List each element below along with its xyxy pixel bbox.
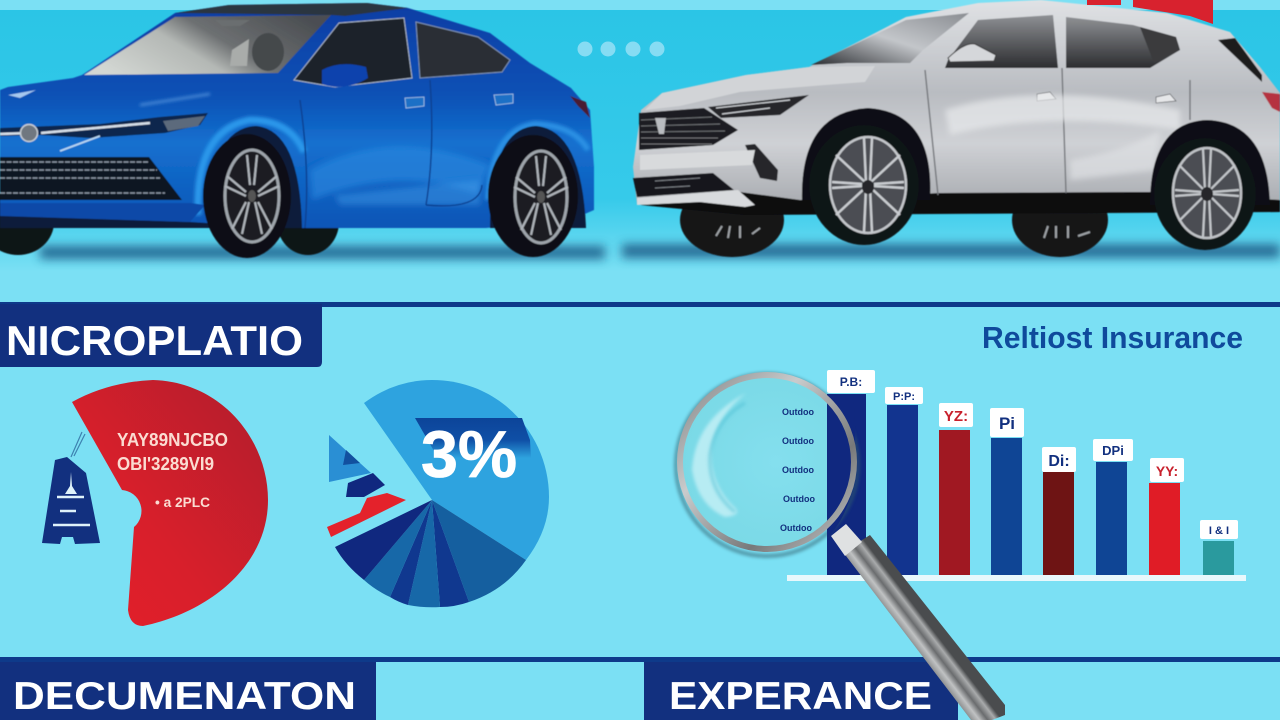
door lines	[925, 68, 1190, 195]
icon: price tag	[42, 432, 100, 544]
heading: nicroplatio: NICROPLATIO	[6, 317, 303, 364]
mirror	[948, 44, 996, 62]
pie text: OBI'3289VI9	[117, 454, 214, 474]
door handles	[1037, 92, 1056, 101]
magnifying glass	[676, 374, 1005, 720]
emblem	[20, 124, 38, 142]
axis labels in lens: Outdoo	[780, 523, 812, 533]
red boxes behind roof	[1087, 0, 1213, 24]
bar chart: YZ:	[944, 408, 968, 425]
bars	[827, 394, 1234, 575]
grille	[639, 108, 738, 150]
blue pie chart	[335, 380, 549, 607]
lens shadow	[676, 374, 858, 556]
tail light	[570, 96, 590, 118]
door lines	[300, 80, 482, 228]
body	[633, 0, 1280, 205]
windows	[811, 13, 969, 65]
axis labels in lens: Outdoo	[782, 465, 814, 475]
bar value labels	[827, 370, 1238, 539]
heading: experience: EXPERANCE	[669, 675, 932, 718]
fender highlights	[198, 120, 304, 215]
car shadows	[40, 244, 1280, 259]
mirror	[322, 64, 368, 87]
rear wheel	[488, 135, 578, 257]
silver SUV	[633, 0, 1280, 257]
heading: documentation	[0, 662, 376, 720]
light sector	[364, 380, 549, 560]
pie text	[117, 430, 228, 510]
far wheels	[680, 183, 1108, 257]
dark sectors	[432, 500, 526, 602]
axis labels in lens: Outdoo	[782, 407, 814, 417]
blue sedan	[0, 3, 594, 258]
chart title: Reltiost Insurance	[982, 320, 1243, 355]
handle	[831, 524, 1005, 720]
bar chart: Di:	[1048, 453, 1070, 470]
pie text: YAY89NJCBO	[117, 430, 228, 450]
front wheel	[809, 125, 919, 245]
axis	[787, 575, 1246, 581]
axis labels in lens: Outdoo	[782, 436, 814, 446]
ring	[680, 375, 854, 549]
front wheel	[203, 134, 291, 258]
panel highlights	[310, 146, 490, 200]
windows	[84, 15, 331, 75]
bar chart: P:P:	[893, 391, 915, 403]
grille	[0, 157, 182, 200]
lower lip	[0, 203, 205, 222]
hood line	[645, 66, 875, 110]
heading: documentation: DECUMENATON	[13, 675, 356, 718]
headlight strip	[0, 113, 208, 138]
bumper	[745, 144, 778, 181]
detached pie pieces	[327, 435, 406, 537]
bar chart: I & I	[1209, 525, 1229, 537]
headlight	[708, 95, 809, 118]
tail light	[1262, 92, 1280, 112]
bar chart: YY:	[1156, 463, 1178, 479]
heading: experience	[644, 662, 958, 720]
far wheels	[0, 189, 339, 255]
lens	[680, 375, 854, 549]
rear wheel	[1154, 138, 1256, 250]
lens highlight	[692, 393, 746, 517]
carousel dots	[578, 42, 664, 56]
door handles	[405, 97, 424, 108]
bar chart	[787, 370, 1246, 581]
axis labels in lens: Outdoo	[783, 494, 815, 504]
red pie chart	[72, 380, 268, 626]
lower trim	[640, 180, 1280, 215]
wheel arches	[208, 126, 302, 228]
wheel arches	[802, 108, 930, 200]
bar chart: Pi	[999, 414, 1015, 433]
lower grille	[633, 173, 734, 197]
percentage label: 3%	[421, 417, 517, 491]
grille emblem	[655, 118, 666, 134]
body	[0, 3, 594, 228]
axis labels in lens	[780, 407, 815, 533]
body highlight	[945, 95, 1180, 135]
bar chart: P.B:	[840, 375, 862, 389]
divider lines	[0, 302, 1280, 662]
heading: nicroplatio	[0, 304, 322, 367]
bar chart: DPi	[1102, 443, 1124, 458]
pie text: • a 2PLC	[155, 494, 210, 510]
